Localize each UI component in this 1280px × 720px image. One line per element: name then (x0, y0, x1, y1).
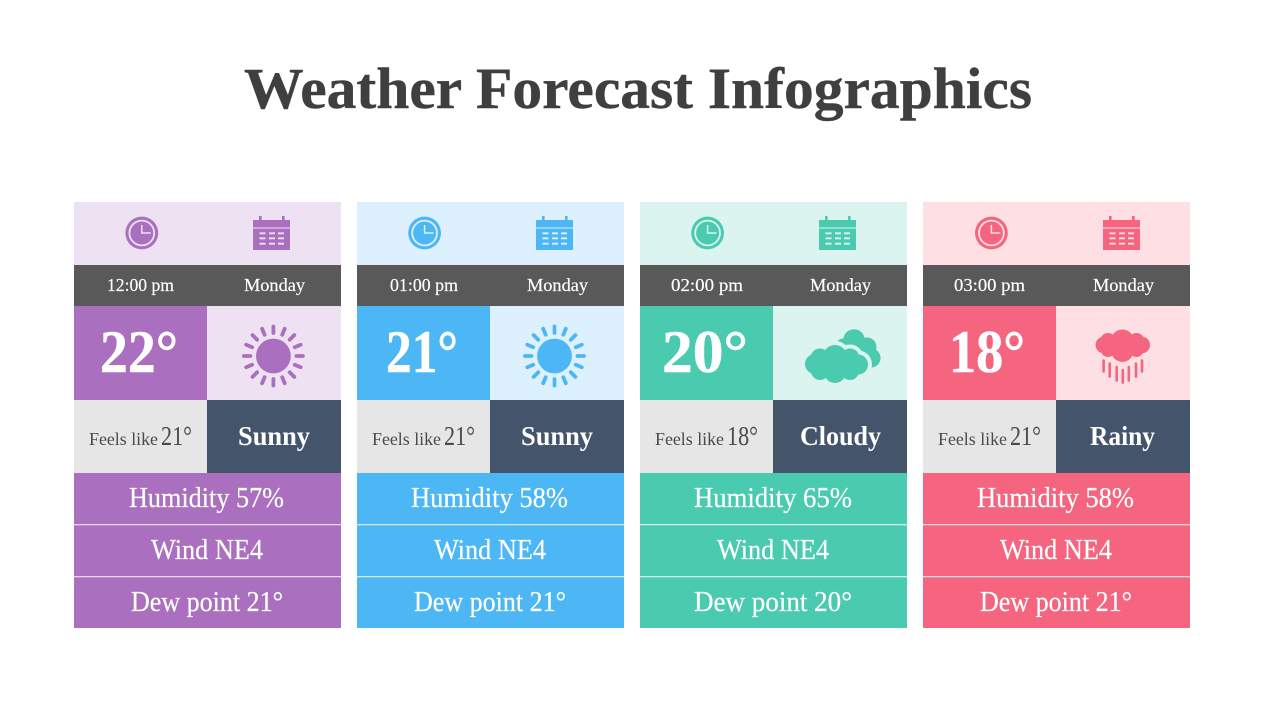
icon: calendar (253, 216, 290, 250)
humidity text: Humidity 58% (411, 483, 568, 514)
temperature cell (923, 306, 1056, 400)
condition cell (1056, 400, 1190, 473)
wind text: Wind NE4 (151, 535, 263, 566)
day label: Monday (1093, 275, 1154, 295)
icon cell (1056, 306, 1190, 400)
humidity row (923, 473, 1190, 525)
feels like cell (640, 400, 773, 473)
humidity text: Humidity 65% (694, 483, 852, 514)
feels like value: 18° (727, 421, 758, 451)
humidity row (640, 473, 907, 525)
icon: rain cloud (1096, 330, 1150, 382)
panel: 12:00 pm forecast (74, 202, 341, 628)
temperature cell (74, 306, 207, 400)
icon: clock (975, 217, 1008, 249)
title: Weather Forecast Infographics (244, 56, 1032, 121)
icon: clock (691, 217, 724, 249)
feels like cell (923, 400, 1056, 473)
icon: clock (408, 217, 441, 249)
rain drops (1104, 360, 1142, 382)
time label: 12:00 pm (107, 275, 174, 295)
icon: calendar (1103, 216, 1140, 250)
wind text: Wind NE4 (1000, 535, 1112, 566)
time and day bar (923, 265, 1190, 306)
icon: calendar (536, 216, 573, 250)
humidity text: Humidity 57% (129, 483, 284, 514)
header band (923, 202, 1190, 265)
wind row (357, 525, 624, 577)
temperature cell (640, 306, 773, 400)
temperature: 18° (949, 319, 1025, 385)
time label: 03:00 pm (954, 275, 1025, 295)
dew point row (640, 577, 907, 628)
front cloud (805, 345, 868, 383)
feels like cell (74, 400, 207, 473)
wind row (640, 525, 907, 577)
condition cell (207, 400, 341, 473)
header band (357, 202, 624, 265)
icon: calendar (819, 216, 856, 250)
condition: Cloudy (800, 421, 881, 451)
icon cell (207, 306, 341, 400)
icon cell (773, 306, 907, 400)
icon: sun (525, 326, 584, 386)
wind row (923, 525, 1190, 577)
feels like label: Feels like (938, 429, 1007, 449)
temperature: 20° (662, 319, 748, 385)
feels like value: 21° (161, 421, 192, 451)
time and day bar (640, 265, 907, 306)
dew point text: Dew point 21° (980, 587, 1132, 618)
day label: Monday (244, 275, 305, 295)
back cloud (836, 329, 881, 368)
condition cell (773, 400, 907, 473)
dew point row (357, 577, 624, 628)
cloud (1096, 330, 1150, 362)
front cloud gap (810, 345, 868, 383)
condition: Rainy (1090, 421, 1155, 451)
wind row (74, 525, 341, 577)
feels like value: 21° (444, 421, 475, 451)
time label: 02:00 pm (671, 275, 743, 295)
panel: 02:00 pm forecast (640, 202, 907, 628)
dew point row (74, 577, 341, 628)
condition: Sunny (238, 421, 310, 451)
panel: 03:00 pm forecast (923, 202, 1190, 628)
dew point text: Dew point 20° (694, 587, 852, 618)
feels like label: Feels like (372, 429, 441, 449)
panel: 01:00 pm forecast (357, 202, 624, 628)
day label: Monday (810, 275, 871, 295)
time and day bar (357, 265, 624, 306)
time label: 01:00 pm (390, 275, 458, 295)
condition cell (490, 400, 624, 473)
humidity text: Humidity 58% (977, 483, 1134, 514)
dew point text: Dew point 21° (131, 587, 283, 618)
icon cell (490, 306, 624, 400)
humidity row (74, 473, 341, 525)
temperature cell (357, 306, 490, 400)
dew point row (923, 577, 1190, 628)
header band (640, 202, 907, 265)
feels like value: 21° (1010, 421, 1041, 451)
wind text: Wind NE4 (717, 535, 829, 566)
header band (74, 202, 341, 265)
icon: cloud (805, 329, 881, 383)
day label: Monday (527, 275, 588, 295)
dew point text: Dew point 21° (414, 587, 566, 618)
wind text: Wind NE4 (434, 535, 546, 566)
time and day bar (74, 265, 341, 306)
temperature: 22° (100, 319, 178, 385)
feels like cell (357, 400, 490, 473)
condition: Sunny (521, 421, 593, 451)
icon: clock (125, 217, 158, 249)
feels like label: Feels like (655, 429, 724, 449)
temperature: 21° (386, 319, 458, 385)
feels like label: Feels like (89, 429, 158, 449)
humidity row (357, 473, 624, 525)
icon: sun (244, 326, 303, 386)
